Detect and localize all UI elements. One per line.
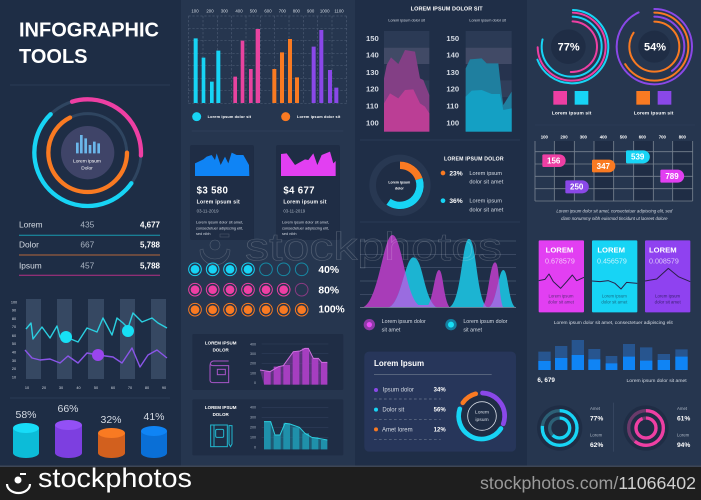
table: values: 435 (80, 220, 95, 230)
card: magenta area stat: $4 677 (283, 186, 315, 197)
dot progress rows: 40% (318, 265, 339, 276)
bar chart: 500 (250, 9, 258, 14)
cylinder stats (13, 403, 167, 458)
bar chart: 900 (307, 9, 315, 14)
watermark (200, 226, 502, 269)
panel: lorem ipsum breakdown: Ipsum dolor (383, 388, 414, 394)
card: blue area stat: Lorem ipsum sit (197, 199, 240, 205)
radial chart 77%: 77% (558, 42, 580, 54)
bar chart: 600 (264, 9, 272, 14)
wave chart legend: sit amet (382, 328, 401, 334)
line chart: 50 (12, 342, 16, 346)
line chart: 60 (12, 334, 16, 338)
area chart: teal: 120 (446, 85, 459, 94)
card: magenta area stat: Lorem ipsum dolor sit amet, (282, 221, 329, 225)
bar chart: Lorem ipsum dolor sit (297, 115, 341, 119)
tag grid chart: 800 (679, 135, 687, 140)
table: values: Lorem (19, 220, 43, 230)
tag grid chart: 200 (560, 135, 568, 140)
wave chart legend (364, 319, 508, 334)
ring stats: pink (613, 403, 690, 452)
line chart: 70 (12, 325, 16, 329)
line chart: 100 (11, 300, 17, 304)
dot progress rows (189, 263, 345, 316)
area chart: pink: 130 (366, 68, 379, 77)
ring stats: cyan: Lorem (590, 433, 603, 438)
area chart: teal: 110 (446, 101, 459, 110)
area chart: teal (446, 31, 512, 132)
value cards: Lorem ipsum dolor sit amet, consectetuer adipiscing elit (554, 320, 673, 326)
panel: purple mini chart (192, 334, 343, 390)
panel: purple mini chart: 0 (254, 381, 256, 385)
table: values: Dolor (19, 240, 39, 250)
wave chart legend: Lorem ipsum dolor (463, 319, 508, 325)
line chart: 10 (12, 376, 16, 380)
panel: cyan mini chart (192, 399, 343, 455)
area chart: pink: 140 (366, 51, 379, 60)
radial chart 77% (534, 9, 610, 117)
line chart: 40 (12, 350, 16, 354)
segmented donut: ipsum (475, 417, 489, 423)
ring stats: pink: 94% (677, 442, 690, 449)
heading: area charts: Lorem ipsum dolor sit (469, 19, 507, 23)
table: values: 5,788 (140, 241, 161, 250)
tag grid chart: 347 (597, 162, 611, 171)
donut with legend: dolor sit amet (469, 180, 504, 186)
cylinder stats: 32% (100, 414, 122, 426)
table: values: 667 (80, 240, 95, 250)
area chart: pink: 100 (366, 118, 379, 127)
panel: purple mini chart: 300 (250, 352, 256, 356)
footer bar: stockphotos (38, 463, 192, 493)
value cards: LOREM (649, 245, 677, 254)
line chart: 40 (76, 386, 81, 390)
line chart: 90 (162, 386, 166, 390)
bar chart: 700 (279, 9, 287, 14)
ring stats: cyan: Amet (590, 406, 601, 411)
panel: purple mini chart: 400 (250, 342, 256, 346)
value cards: LOREM (597, 245, 625, 254)
card: blue area stat: 03-11-2019 (197, 208, 219, 213)
value cards: Lorem ipsum (602, 293, 627, 298)
panel: lorem ipsum breakdown (364, 352, 516, 452)
donut with legend: 36% (449, 198, 463, 205)
donut with legend: dolor sit amet (469, 208, 504, 214)
table: values (19, 220, 161, 276)
value cards: dolor sit amet (601, 300, 628, 305)
tag grid chart: 156 (547, 157, 561, 166)
stacked bars: 6, 679 (537, 377, 555, 384)
value cards: 0.678579 (545, 257, 575, 265)
cylinder stats: 41% (143, 411, 165, 423)
tag grid chart: 789 (665, 172, 679, 181)
line chart: 70 (128, 386, 132, 390)
dot progress rows: 80% (318, 286, 339, 297)
line chart: 30 (12, 359, 16, 363)
icon: book (210, 361, 229, 383)
tag grid chart: 100 (541, 135, 549, 140)
table: values: 4,677 (140, 221, 161, 230)
card: magenta area stat (276, 145, 340, 240)
donut with legend: Lorem ipsum (388, 181, 410, 185)
title (19, 20, 159, 68)
panel: lorem ipsum breakdown: 12% (434, 427, 446, 433)
area chart: teal: 150 (446, 34, 459, 43)
title: TOOLS (19, 46, 88, 68)
area chart: teal: 140 (446, 51, 459, 60)
table: values: 457 (80, 260, 95, 270)
card: magenta area stat: sed nibh (282, 232, 296, 236)
panel: cyan mini chart: LOREM IPSUM (205, 405, 237, 410)
watermark: stockphotos (245, 226, 502, 269)
table: values: Ipsum (19, 260, 42, 270)
tag grid chart: 500 (620, 135, 628, 140)
area chart: pink: 150 (366, 34, 379, 43)
tag grid chart: 600 (639, 135, 647, 140)
icon: notebook (211, 425, 232, 447)
value cards: Lorem ipsum (655, 293, 681, 298)
bar chart: 800 (293, 9, 301, 14)
panel: cyan mini chart: 300 (250, 415, 256, 419)
area chart: teal: 130 (446, 68, 459, 77)
donut with legend: LOREM IPSUM DOLOR (444, 157, 504, 163)
ring stats: cyan: 77% (590, 415, 603, 422)
tag grid chart: 700 (659, 135, 667, 140)
value cards: dolor sit amet (655, 300, 681, 305)
panel: lorem ipsum breakdown: 34% (434, 388, 446, 394)
stacked bars: Lorem ipsum dolor sit amet (627, 378, 687, 384)
footer bar (0, 463, 701, 500)
card: magenta area stat: Lorem ipsum sit (283, 199, 327, 205)
line chart: 80 (12, 317, 16, 321)
tag grid chart: Lorem ipsum dolor sit amet, consectetuer adipiscing elit, sed (556, 209, 673, 214)
footer bar: stockphotos.com/11066402 (480, 473, 696, 493)
line chart: 10 (25, 386, 29, 390)
tag grid chart (535, 135, 693, 221)
ring stats: cyan (537, 405, 603, 451)
panel: main radial chart (13, 78, 162, 227)
card: blue area stat: consectetuer adipiscing elit, (196, 226, 243, 230)
donut with legend: 23% (449, 170, 463, 177)
radial chart 54% (617, 9, 692, 117)
card: magenta area stat: consectetuer adipiscing elit, (282, 226, 329, 230)
area chart: teal: 100 (446, 118, 459, 127)
tag grid chart: 539 (631, 153, 645, 162)
card: blue area stat: sed nibh (196, 232, 210, 236)
card: blue area stat: $3 580 (197, 186, 228, 197)
segmented donut: Lorem (475, 410, 489, 416)
line chart: 30 (59, 386, 63, 390)
radial chart 77%: Lorem ipsum sit (552, 111, 592, 117)
segmented donut (450, 384, 514, 448)
ring stats: pink: 61% (677, 415, 690, 422)
tag grid chart: 400 (600, 135, 608, 140)
panel: lorem ipsum breakdown: 56% (434, 408, 446, 414)
card: blue area stat (190, 145, 254, 240)
panel: lorem ipsum breakdown: Amet lorem (382, 427, 413, 433)
panel: lorem ipsum breakdown: Dolor sit (382, 408, 405, 414)
value cards: dolor sit amet (548, 300, 575, 305)
tag grid chart: 250 (570, 183, 584, 192)
panel: cyan mini chart: 100 (250, 435, 256, 439)
table: values: 5,788 (140, 261, 161, 270)
value cards: 0.008579 (649, 257, 679, 265)
bar chart: 400 (235, 9, 243, 14)
panel: purple mini chart: 200 (250, 362, 256, 366)
bar chart: 300 (221, 9, 229, 14)
value cards (539, 240, 690, 326)
panel: main radial chart: Lorem ipsum (73, 158, 101, 164)
wave chart legend: sit amet (463, 328, 483, 334)
value cards: LOREM (546, 245, 573, 254)
ring stats: cyan: 62% (590, 442, 603, 449)
cylinder stats: 66% (57, 403, 79, 415)
panel: cyan mini chart: 200 (250, 426, 256, 430)
bar chart (188, 9, 347, 131)
panel: lorem ipsum breakdown: Lorem Ipsum (374, 359, 424, 368)
donut with legend: Lorem ipsum (469, 199, 502, 205)
value cards: Lorem ipsum (548, 293, 574, 298)
bar chart: 100 (191, 9, 199, 14)
value cards: 0.456579 (597, 257, 627, 265)
area chart: pink: 110 (366, 101, 378, 110)
ring stats: pink: Amet (677, 406, 688, 411)
donut with legend: Lorem ipsum (469, 171, 502, 177)
line chart: 80 (145, 386, 149, 390)
line chart: 20 (12, 367, 16, 371)
tag grid chart: diam nonummy nibh euismod tincidunt ut laoreet dolore (561, 216, 668, 221)
panel: purple mini chart: 100 (250, 371, 256, 375)
bar chart: Lorem ipsum dolor sit (208, 115, 252, 119)
line chart: 20 (42, 386, 46, 390)
bar chart: 1000 (320, 9, 330, 14)
line chart (11, 299, 167, 390)
panel: cyan mini chart: DOLOR (213, 412, 230, 417)
cylinder stats: 58% (15, 409, 37, 421)
line chart: 90 (12, 308, 16, 312)
bar chart: 200 (206, 9, 214, 14)
heading: area charts: Lorem ipsum dolor sit (388, 19, 426, 23)
donut with legend (369, 155, 504, 216)
panel: purple mini chart: LOREM IPSUM (205, 341, 237, 346)
area chart: pink: 120 (366, 85, 379, 94)
line chart: 50 (94, 386, 98, 390)
wave chart legend: Lorem ipsum dolor (382, 319, 426, 325)
bar chart: 1100 (334, 9, 344, 14)
heading: area charts: LOREM IPSUM DOLOR SIT (411, 6, 483, 12)
stacked bars (537, 340, 688, 384)
area chart: pink (366, 31, 429, 132)
ring stats: pink: Lorem (677, 433, 690, 438)
card: blue area stat: Lorem ipsum dolor sit amet, (196, 221, 243, 225)
title: INFOGRAPHIC (19, 20, 159, 42)
card: magenta area stat: 03-11-2019 (283, 208, 306, 213)
line chart: 60 (111, 386, 115, 390)
radial chart 54%: Lorem ipsum sit (634, 111, 674, 117)
heading: area charts (388, 6, 507, 23)
panel: cyan mini chart: 0 (254, 445, 256, 449)
dot progress rows: 100% (318, 305, 345, 316)
donut with legend: dolor (395, 187, 404, 191)
radial chart 54%: 54% (644, 42, 666, 54)
panel: main radial chart: Dolor (81, 166, 93, 172)
panel: purple mini chart: DOLOR (213, 348, 230, 353)
wave area chart (360, 235, 516, 308)
panel: cyan mini chart: 400 (250, 406, 256, 410)
tag grid chart: 300 (580, 135, 588, 140)
